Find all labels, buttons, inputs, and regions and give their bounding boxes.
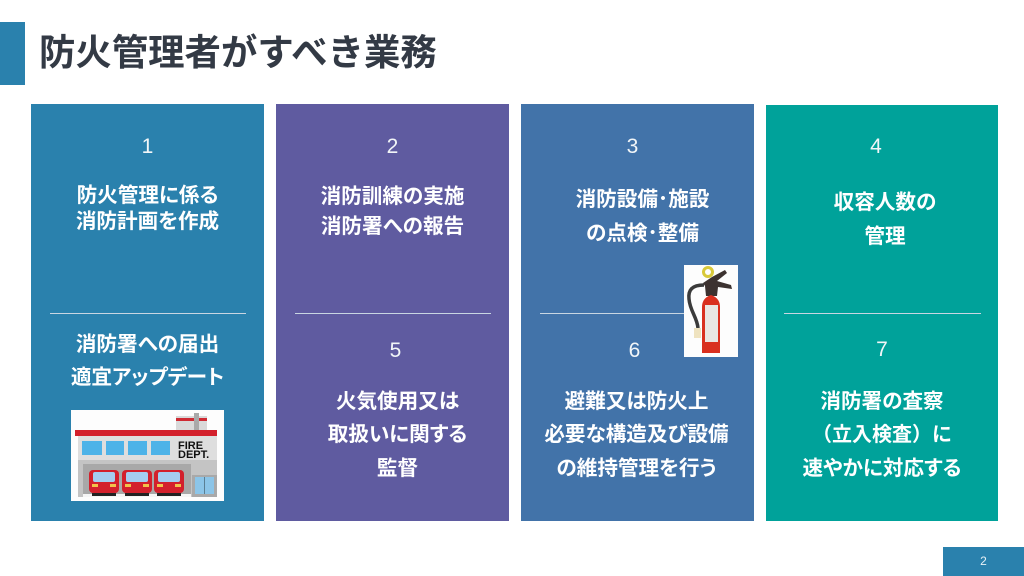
- text: drills: 消防署への報告: [321, 215, 464, 238]
- text: inspection: [576, 188, 709, 245]
- text: structure maintenance: 必要な構造及び設備: [544, 423, 729, 446]
- text: notification: 適宜アップデート: [71, 366, 224, 389]
- panel: duties 2 and 5: [276, 104, 509, 521]
- number 3: 3: [627, 135, 638, 158]
- title: 防火管理者がすべき業務: [39, 32, 437, 73]
- number 7: 7: [876, 338, 888, 361]
- text: capacity: 管理: [864, 225, 906, 248]
- text: inspection: の点検･整備: [586, 222, 699, 245]
- panel: duties 3 and 6: [521, 104, 754, 521]
- number 2: 2: [387, 135, 398, 158]
- page number: 2: [980, 554, 987, 568]
- text: capacity: [834, 191, 936, 248]
- text: fire plan: 防火管理に係る: [77, 184, 218, 207]
- title accent bar: [0, 22, 25, 85]
- number 4: 4: [870, 135, 882, 158]
- text: notification: 消防署への届出: [76, 333, 219, 356]
- text: drills: [321, 185, 464, 238]
- text: inspection: 消防設備･施設: [576, 188, 709, 211]
- text: structure maintenance: の維持管理を行う: [556, 457, 717, 480]
- page number: [943, 547, 1024, 576]
- text: inspection response: [803, 390, 961, 480]
- text: notification: [71, 333, 224, 389]
- text: inspection response: 速やかに対応する: [803, 457, 961, 480]
- text: inspection response: （立入検査）に: [812, 424, 952, 446]
- icon: fire station: [71, 410, 224, 501]
- text: supervision: 火気使用又は: [336, 390, 459, 413]
- panel: duties 4 and 7: [766, 105, 998, 521]
- text: capacity: 収容人数の: [834, 191, 936, 214]
- text: supervision: 監督: [377, 457, 418, 480]
- icon: fire extinguisher: [684, 265, 738, 357]
- text: inspection response: 消防署の査察: [820, 390, 944, 413]
- text: supervision: [328, 390, 467, 480]
- text: structure maintenance: 避難又は防火上: [565, 390, 708, 413]
- number 6: 6: [629, 339, 640, 362]
- icon: fire station: FIRE: [178, 440, 203, 452]
- icon: fire station: DEPT.: [178, 448, 209, 460]
- number 1: 1: [142, 135, 153, 158]
- text: drills: 消防訓練の実施: [321, 185, 464, 208]
- text: supervision: 取扱いに関する: [328, 423, 467, 446]
- text: fire plan: [76, 184, 219, 233]
- panel: duties 1: [31, 104, 264, 521]
- number 5: 5: [390, 339, 401, 362]
- text: structure maintenance: [544, 390, 729, 480]
- text: fire plan: 消防計画を作成: [76, 210, 219, 233]
